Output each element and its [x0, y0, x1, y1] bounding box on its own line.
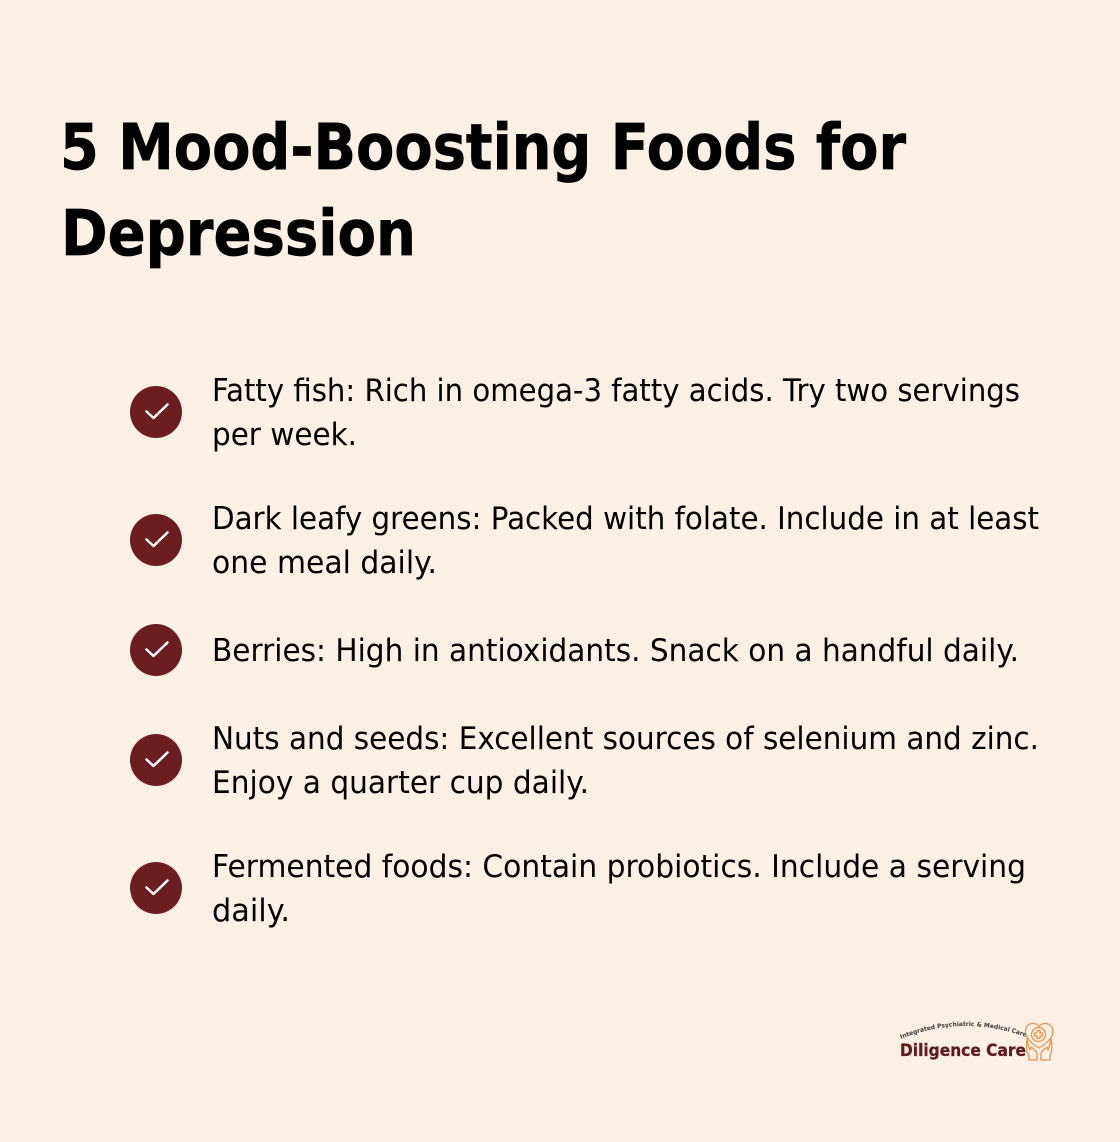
list item: fermented foods: [130, 849, 1026, 929]
title: [60, 111, 906, 270]
icon: check circle: [130, 624, 182, 676]
icon: check circle: [130, 734, 182, 786]
item text: per week.: [212, 417, 357, 453]
item text: [212, 721, 1039, 801]
logo wordmark: Diligence Care: [900, 1041, 1026, 1061]
logo tagline: Integrated Psychiatric & Medical Care: [900, 1021, 1026, 1039]
item text: Fermented foods: Contain probiotics. Include a serving: [212, 849, 1026, 885]
title: Depression: [61, 197, 416, 270]
item text: one meal daily.: [212, 545, 437, 581]
list item: fatty fish: [130, 373, 1020, 453]
item text: [212, 373, 1020, 453]
list item: dark leafy greens: [130, 501, 1039, 581]
item text: [212, 849, 1026, 929]
item text: Nuts and seeds: Excellent sources of selenium and zinc.: [212, 721, 1039, 757]
item text: Berries: High in antioxidants. Snack on a handful daily.: [212, 633, 1019, 669]
logo icon: heart and hands: [1026, 1024, 1053, 1060]
icon: check circle: [130, 862, 182, 914]
icon: check circle: [130, 514, 182, 566]
item text: daily.: [212, 893, 290, 929]
list item: nuts and seeds: [130, 721, 1039, 801]
item text: Enjoy a quarter cup daily.: [212, 765, 589, 801]
item text: Fatty fish: Rich in omega-3 fatty acids. Try two servings: [212, 373, 1020, 409]
title: 5 Mood-Boosting Foods for: [60, 111, 906, 184]
logo: Diligence Care: [900, 1021, 1054, 1061]
icon: check circle: [130, 386, 182, 438]
list item: berries: [130, 624, 1019, 676]
item text: [212, 501, 1039, 581]
item text: Dark leafy greens: Packed with folate. Include in at least: [212, 501, 1039, 537]
